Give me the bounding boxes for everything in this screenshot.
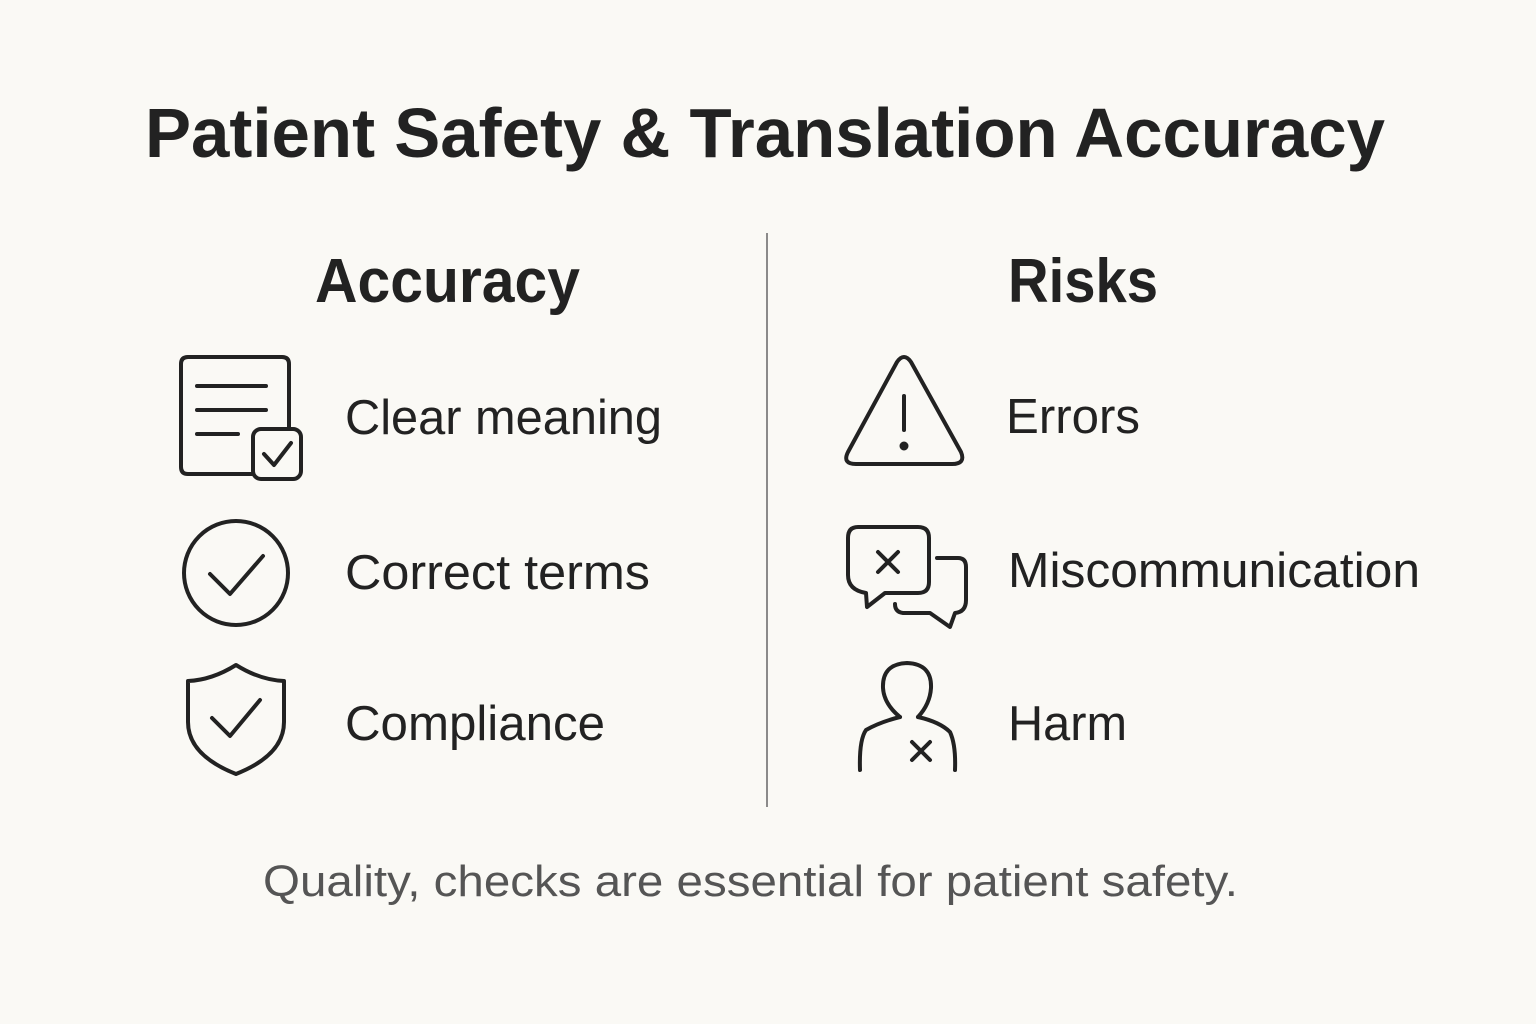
heading: accuracy: Accuracy [315, 247, 580, 316]
icon: shield check [188, 665, 284, 774]
text: miscommunication: Miscommunication [1008, 544, 1420, 598]
icon: chat bubbles with x [848, 527, 966, 627]
icon: circle check [184, 521, 288, 625]
text: correct terms: Correct terms [345, 546, 650, 600]
title: Patient Safety & Translation Accuracy [145, 94, 1385, 172]
heading: risks: Risks [1008, 247, 1158, 316]
icon: person with x [860, 663, 955, 770]
panel: risks [846, 247, 1420, 770]
icon: document with check [181, 357, 301, 479]
text: compliance: Compliance [345, 697, 605, 751]
text: errors: Errors [1006, 390, 1140, 444]
text: harm: Harm [1008, 697, 1127, 751]
icon: warning triangle [846, 357, 962, 464]
footer caption: Quality, checks are essential for patient safety. [263, 857, 1238, 906]
panel: accuracy [181, 247, 662, 774]
text: clear meaning: Clear meaning [345, 391, 662, 445]
